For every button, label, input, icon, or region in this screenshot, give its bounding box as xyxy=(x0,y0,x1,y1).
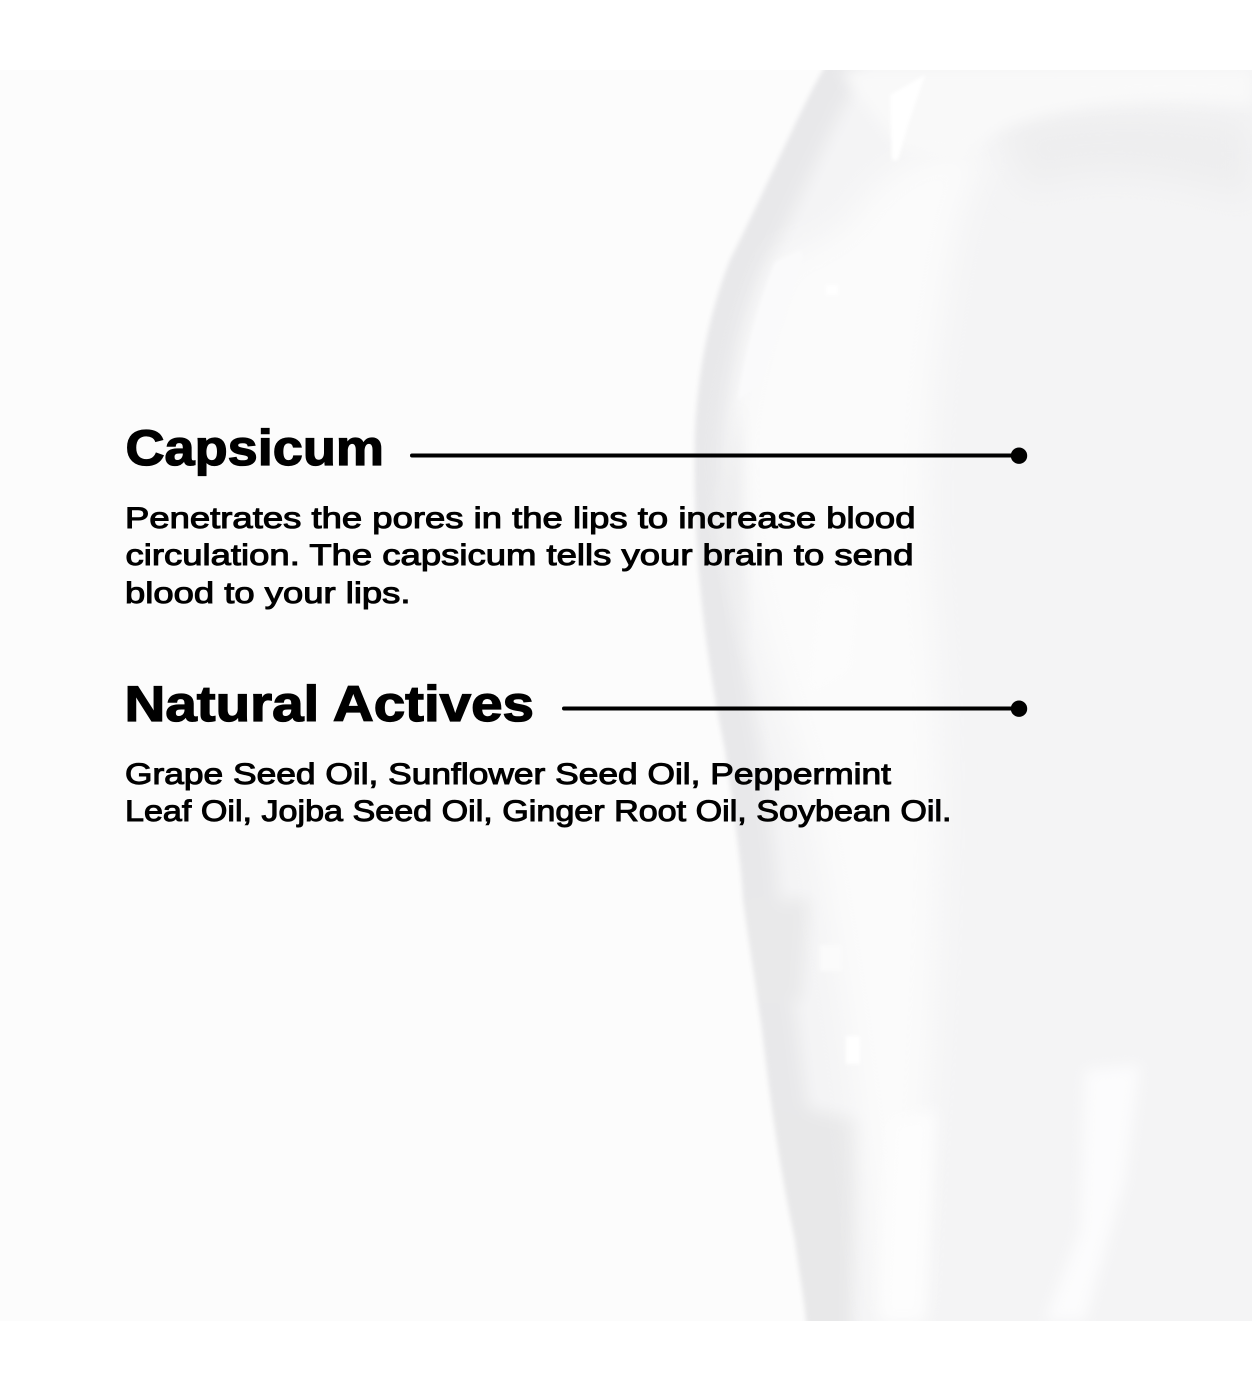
text block: Capsicum description xyxy=(125,502,916,610)
heading: Natural Actives: Natural Actives xyxy=(124,676,534,732)
text block: Capsicum description: Penetrates the pores in the lips to increase blood xyxy=(125,502,916,535)
text block: Natural Actives description: Grape Seed Oil, Sunflower Seed Oil, Peppermint xyxy=(125,758,891,791)
text block: Natural Actives description xyxy=(125,758,952,828)
text block: Natural Actives description: Leaf Oil, Jojba Seed Oil, Ginger Root Oil, Soybean Oil. xyxy=(125,795,952,828)
connector line: Capsicum xyxy=(410,448,1027,464)
text block: Capsicum description: circulation. The capsicum tells your brain to send xyxy=(126,539,914,572)
heading: Capsicum: Capsicum xyxy=(126,420,384,476)
background panel: blurred gel texture xyxy=(693,70,1252,1321)
connector line: Natural Actives xyxy=(562,700,1027,717)
text block: Capsicum description: blood to your lips. xyxy=(125,577,410,610)
